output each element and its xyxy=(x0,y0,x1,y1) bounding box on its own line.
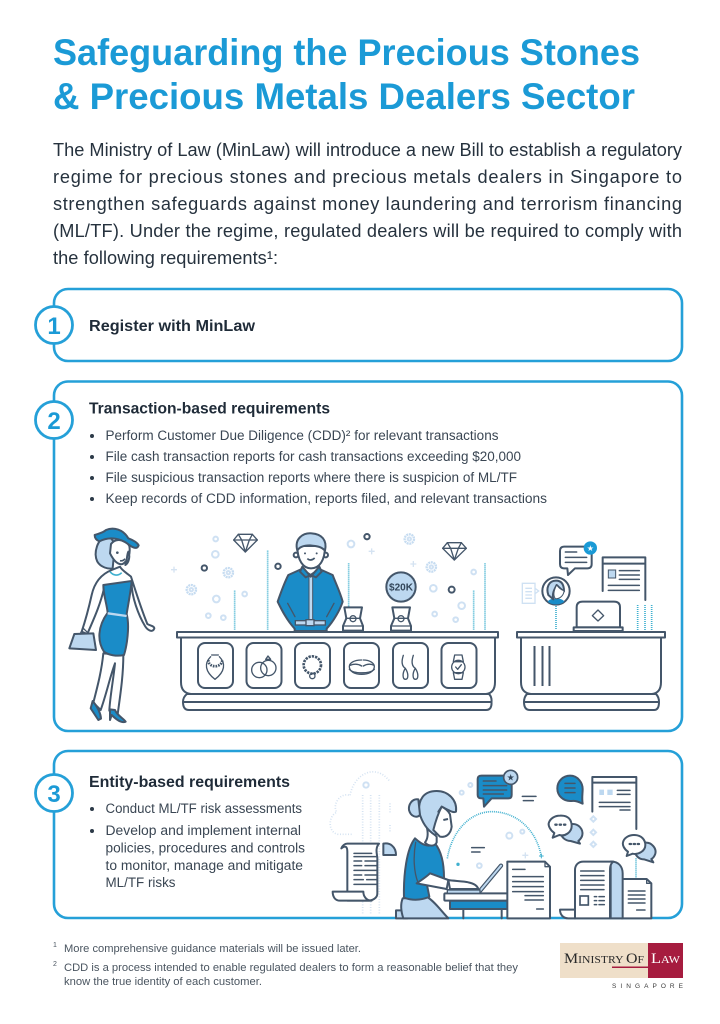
footnotes: know the true identity of each customer. xyxy=(64,976,262,988)
heading: register: Register with MinLaw xyxy=(89,318,256,335)
bullet list: entity requirements: Develop and implement internal xyxy=(106,823,301,838)
number badge 3: 3 xyxy=(47,781,61,808)
price tag: $20K xyxy=(386,572,416,602)
necklace xyxy=(110,572,122,575)
icon: web window xyxy=(592,777,636,829)
icon: laptop xyxy=(574,602,623,631)
title: Safeguarding the Precious Stones xyxy=(53,31,640,73)
legs xyxy=(93,653,123,717)
hair xyxy=(96,535,115,569)
bullet list: transaction requirements xyxy=(90,428,547,506)
icon: watch xyxy=(452,655,465,679)
icon: blue speech bubble with star: ★ xyxy=(507,773,515,783)
logo: Ministry of Law Singapore: MINISTRY OF xyxy=(564,951,644,967)
torso and arms xyxy=(82,567,154,634)
number badge 1: 1 xyxy=(47,313,61,340)
ring boxes, price tag and right sparkles xyxy=(343,534,485,631)
panel: requirement 1 xyxy=(36,289,682,361)
icon: blue speech bubble with star xyxy=(478,770,518,807)
intro paragraph: (ML/TF). Under the regime, regulated dealers will be required to comply with xyxy=(53,221,682,241)
dotted arc xyxy=(447,812,541,858)
title xyxy=(53,31,640,117)
footnotes xyxy=(53,942,519,988)
heading: entity-based: Entity-based requirements xyxy=(89,774,290,791)
bullet list: entity requirements: to monitor, manage and mitigate xyxy=(106,858,303,873)
illustration: compliance officer at desk xyxy=(330,770,656,918)
bag xyxy=(69,633,96,650)
small document right xyxy=(622,879,651,918)
title: & Precious Metals Dealers Sector xyxy=(53,75,635,117)
footnotes: 2 xyxy=(53,961,57,968)
intro paragraph: the following requirements¹: xyxy=(53,248,278,268)
icon: scroll left xyxy=(333,843,396,901)
bullet list: entity requirements: ML/TF risks xyxy=(106,875,176,890)
number badge 3 xyxy=(36,774,72,812)
icon: speech bubble with star: ★ xyxy=(587,544,594,553)
small marks xyxy=(456,783,544,868)
number badge 2: 2 xyxy=(47,408,61,435)
icon: earrings xyxy=(402,655,418,679)
icon: speech bubbles one xyxy=(549,816,582,844)
icon: pale document xyxy=(522,583,539,603)
price tag: $20K: $20K xyxy=(389,583,414,594)
collar xyxy=(300,567,322,577)
hat xyxy=(95,529,139,548)
illustration: shop scene xyxy=(69,529,665,722)
figure: female customer xyxy=(69,529,154,722)
panel: requirement 2 xyxy=(36,382,682,731)
intro paragraph: strengthen safeguards against money laundering and terrorism financing xyxy=(53,194,682,214)
icon: rings xyxy=(252,656,276,678)
shoes xyxy=(91,701,101,720)
bullet list: transaction requirements: Perform Customer Due Diligence (CDD)² for relevant transactions xyxy=(106,428,499,443)
intro paragraph: The Ministry of Law (MinLaw) will introduce a new Bill to establish a regulatory xyxy=(53,140,683,160)
shirt xyxy=(278,569,343,631)
large scroll xyxy=(560,862,623,918)
intro paragraph: regime for precious stones and precious metals dealers in Singapore to xyxy=(53,167,682,187)
icon: diamond xyxy=(443,543,466,560)
bullet list: transaction requirements: File suspicious transaction reports where there is suspicion of ML/TF xyxy=(106,470,517,485)
icon: bracelet xyxy=(304,656,321,679)
logo: Ministry of Law Singapore: LAW xyxy=(651,951,681,967)
bullet list: entity requirements: Conduct ML/TF risk assessments xyxy=(106,801,302,816)
logo: Ministry of Law Singapore xyxy=(560,943,684,990)
logo: Ministry of Law Singapore: SINGAPORE xyxy=(612,983,684,990)
main counter xyxy=(177,632,498,710)
diamonds xyxy=(591,816,596,847)
icon: ring box xyxy=(391,607,411,631)
icon: diamond xyxy=(234,534,257,552)
jewellery icons xyxy=(206,655,374,679)
icon: speech bubbles two xyxy=(623,835,656,862)
icon: round blue bubble xyxy=(557,776,583,804)
footnotes: More comprehensive guidance materials will be issued later. xyxy=(64,943,361,955)
icon: laptop xyxy=(447,866,501,893)
bullet list: transaction requirements: Keep records of CDD information, reports filed, and relevant transactions xyxy=(106,491,547,506)
icon: profile document xyxy=(603,557,645,600)
document centre xyxy=(507,862,550,918)
number badge 2 xyxy=(36,402,72,438)
head xyxy=(294,553,298,557)
desk xyxy=(444,893,519,918)
intro paragraph xyxy=(53,140,683,268)
dotted connectors xyxy=(556,605,652,631)
number badge 1 xyxy=(36,306,72,344)
heading: transaction-based: Transaction-based requirements xyxy=(89,400,330,418)
bullet list: transaction requirements: File cash transaction reports for cash transactions exceeding $20,000 xyxy=(106,449,521,464)
footnotes: CDD is a process intended to enable regulated dealers to form a reasonable belief that they xyxy=(64,962,519,974)
icon: necklace xyxy=(206,655,224,679)
pale cloud and data lines xyxy=(330,772,390,915)
bullet list: entity requirements xyxy=(90,801,305,890)
service counter xyxy=(517,632,665,710)
face xyxy=(110,540,130,564)
background sparkles left of shopkeeper xyxy=(171,534,375,630)
footnotes: 1 xyxy=(53,942,57,949)
dress xyxy=(99,581,132,656)
figure: shopkeeper xyxy=(278,533,343,631)
figure: woman typing xyxy=(396,791,478,918)
icon: agent avatar xyxy=(542,577,570,605)
service desk items xyxy=(522,541,652,631)
icon: ring box left xyxy=(343,607,363,631)
bullet list: entity requirements: policies, procedures and controls xyxy=(106,840,305,856)
panel: requirement 3 xyxy=(36,751,682,918)
icon: bangle xyxy=(349,660,374,674)
